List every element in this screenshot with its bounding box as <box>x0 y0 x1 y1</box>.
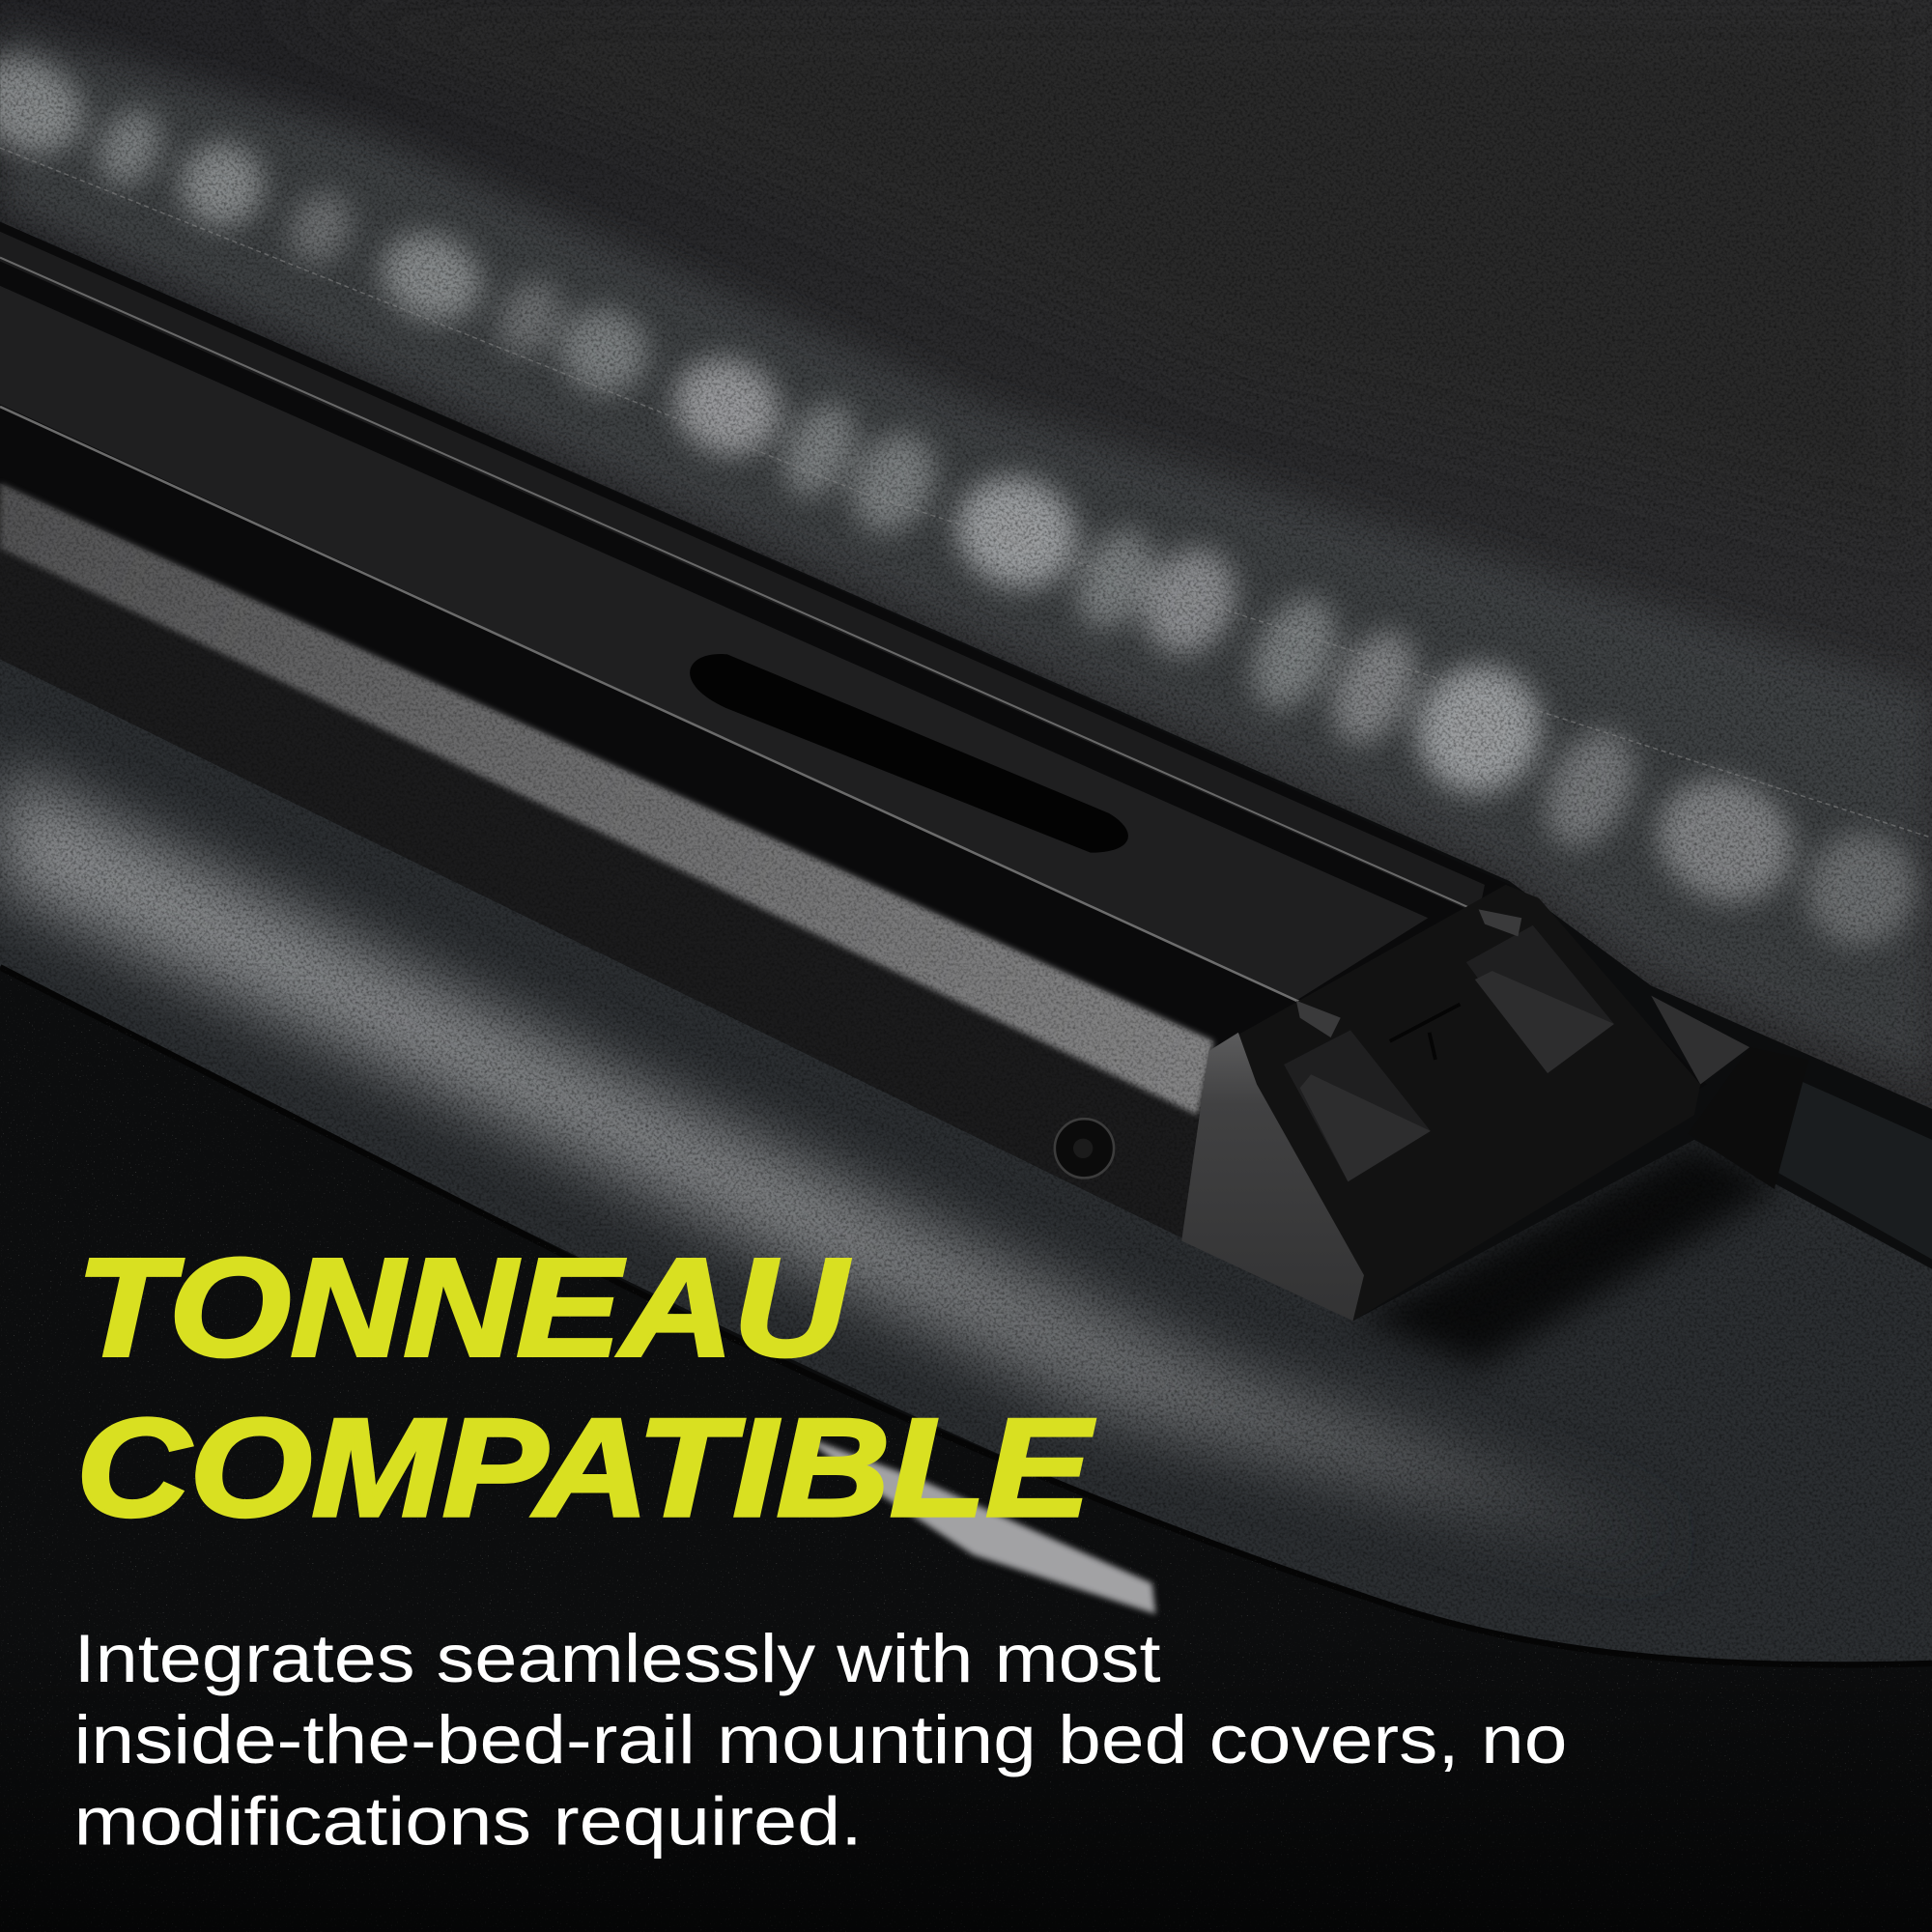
top lip of rail <box>0 232 1485 914</box>
crease highlights <box>0 39 1932 964</box>
right pyramid lit facet <box>1475 971 1614 1073</box>
left pyramid lit facet <box>1300 1074 1431 1181</box>
icon: rail end cap <box>1181 885 1700 1321</box>
plate tip <box>1296 1001 1341 1037</box>
mounting slot <box>690 654 1128 853</box>
rail body <box>0 222 1707 1319</box>
lip tip <box>1479 909 1521 936</box>
panel: bed rail assembly <box>0 224 1485 1237</box>
side rail face <box>0 483 1213 1238</box>
title: COMPATIBLE <box>76 1390 1094 1546</box>
right pyramid <box>1466 925 1614 1073</box>
title <box>76 1230 1094 1546</box>
title: TONNEAU <box>76 1230 851 1385</box>
left pyramid <box>1284 1030 1431 1181</box>
body text: modifications required. <box>74 1782 863 1859</box>
side rail highlight <box>0 483 1213 1115</box>
fender lower edge <box>0 967 1932 1664</box>
lip highlight <box>0 258 1479 912</box>
fender highlight glow <box>0 764 1663 1565</box>
cap grey face <box>1181 1033 1364 1321</box>
band upper shade <box>1891 37 1893 495</box>
cover grain <box>0 0 1932 1109</box>
stitch seam <box>0 148 1932 838</box>
shadow under end cap <box>1355 1140 1786 1368</box>
cap logo <box>1390 1005 1460 1060</box>
panel: right end of bed rail <box>1651 996 1932 1260</box>
fender grain <box>0 653 1932 1676</box>
flat plate <box>0 286 1428 1001</box>
bottom dark fade <box>0 1651 1932 1932</box>
hex screw <box>1055 1119 1114 1178</box>
rail grain <box>0 469 1233 1257</box>
creased band base <box>0 25 1932 1084</box>
panel: textured fender rail <box>0 653 1932 1676</box>
plate lower highlight <box>0 407 1341 1018</box>
panel: vinyl tonneau cover <box>0 0 1932 1109</box>
icon: paint reflection streak <box>801 1435 1155 1614</box>
body text <box>74 1620 1567 1859</box>
paint speckle <box>0 961 1932 1932</box>
body text: Integrates seamlessly with most <box>74 1620 1161 1696</box>
body text: inside-the-bed-rail mounting bed covers, no <box>74 1701 1567 1777</box>
cap body <box>1208 885 1700 1321</box>
